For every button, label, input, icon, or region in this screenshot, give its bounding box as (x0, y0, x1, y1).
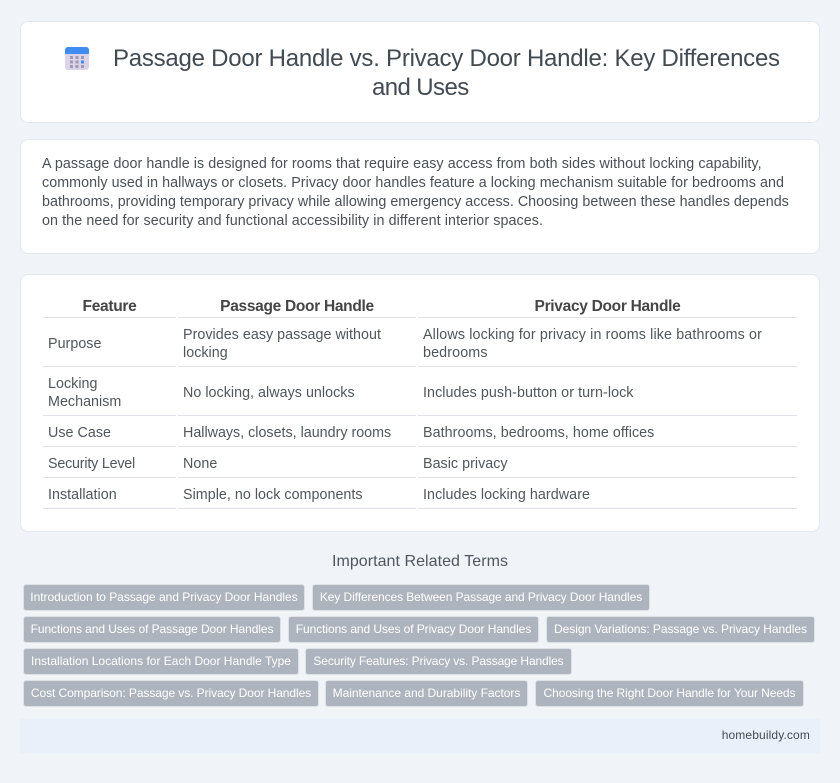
text block: description: on the need for security and functional accessibility in different interior spaces. (42, 213, 543, 229)
panel: comparison table: Includes push-button or turn-lock (423, 385, 634, 401)
tag: Installation Locations for Each Door Handle Type (31, 654, 291, 668)
title (113, 45, 780, 101)
panel: title card (20, 21, 820, 123)
tag: Security Features: Privacy vs. Passage Handles (313, 654, 564, 668)
row: use case: Use Case (48, 425, 111, 441)
tag (535, 680, 804, 707)
tag: Key Differences Between Passage and Privacy Door Handles (320, 590, 642, 604)
tag (312, 584, 650, 611)
tag: Functions and Uses of Passage Door Handles (31, 622, 273, 636)
tag: Functions and Uses of Privacy Door Handles (296, 622, 531, 636)
panel: comparison table: Includes locking hardware (423, 487, 590, 503)
panel: comparison table: Bathrooms, bedrooms, home offices (423, 425, 654, 441)
row: installation: Installation (48, 487, 117, 503)
row: locking mechanism (48, 376, 121, 410)
panel: comparison table: Allows locking for privacy in rooms like bathrooms or (423, 327, 762, 343)
row: purpose: Purpose (48, 336, 101, 352)
panel: comparison table: Hallways, closets, laundry rooms (183, 425, 391, 441)
icon: calendar (65, 47, 89, 70)
text block: description (42, 156, 789, 229)
tag (23, 680, 319, 707)
panel: description (20, 139, 820, 254)
text block: description: A passage door handle is designed for rooms that require easy access from both sides without locking capability, (42, 156, 762, 172)
panel: comparison table: locking (183, 345, 228, 361)
row: locking mechanism: Mechanism (48, 394, 121, 410)
heading: related terms: Important Related Terms (332, 553, 508, 570)
tag: Maintenance and Durability Factors (333, 686, 520, 700)
tag (23, 648, 299, 675)
text block: description: commonly used in hallways or closets. Privacy door handles feature a locking mechanism suitable for bedrooms and (42, 175, 784, 191)
tag: Design Variations: Passage vs. Privacy Handles (554, 622, 807, 636)
table header: Feature (83, 298, 136, 315)
tag (288, 616, 539, 643)
title: and Uses (372, 74, 469, 101)
panel: comparison table: No locking, always unlocks (183, 385, 355, 401)
panel: comparison table: None (183, 456, 217, 472)
tag (325, 680, 528, 707)
footer bar (20, 719, 820, 753)
panel: comparison table: bedrooms (423, 345, 488, 361)
tag (23, 584, 305, 611)
title: Passage Door Handle vs. Privacy Door Handle: Key Differences (113, 45, 780, 72)
panel: comparison table: Passage Door Handle (220, 298, 374, 315)
panel: comparison table (20, 274, 820, 532)
row: locking mechanism: Locking (48, 376, 98, 392)
tag (23, 616, 281, 643)
footer source text: homebuildy.com (722, 728, 810, 742)
tag: Introduction to Passage and Privacy Door Handles (30, 590, 298, 604)
tag (546, 616, 815, 643)
tag: Cost Comparison: Passage vs. Privacy Door Handles (31, 686, 311, 700)
panel: comparison table: Simple, no lock components (183, 487, 363, 503)
panel: comparison table: Privacy Door Handle (535, 298, 680, 315)
panel: comparison table: Provides easy passage without (183, 327, 381, 343)
tag list: related terms (23, 584, 815, 707)
panel: comparison table: Basic privacy (423, 456, 508, 472)
text block: description: bathrooms, providing temporary privacy while allowing emergency access. Choosing between these handles depends (42, 194, 789, 210)
row: security level: Security Level (48, 456, 135, 472)
tag: Choosing the Right Door Handle for Your Needs (544, 686, 795, 700)
tag (305, 648, 572, 675)
